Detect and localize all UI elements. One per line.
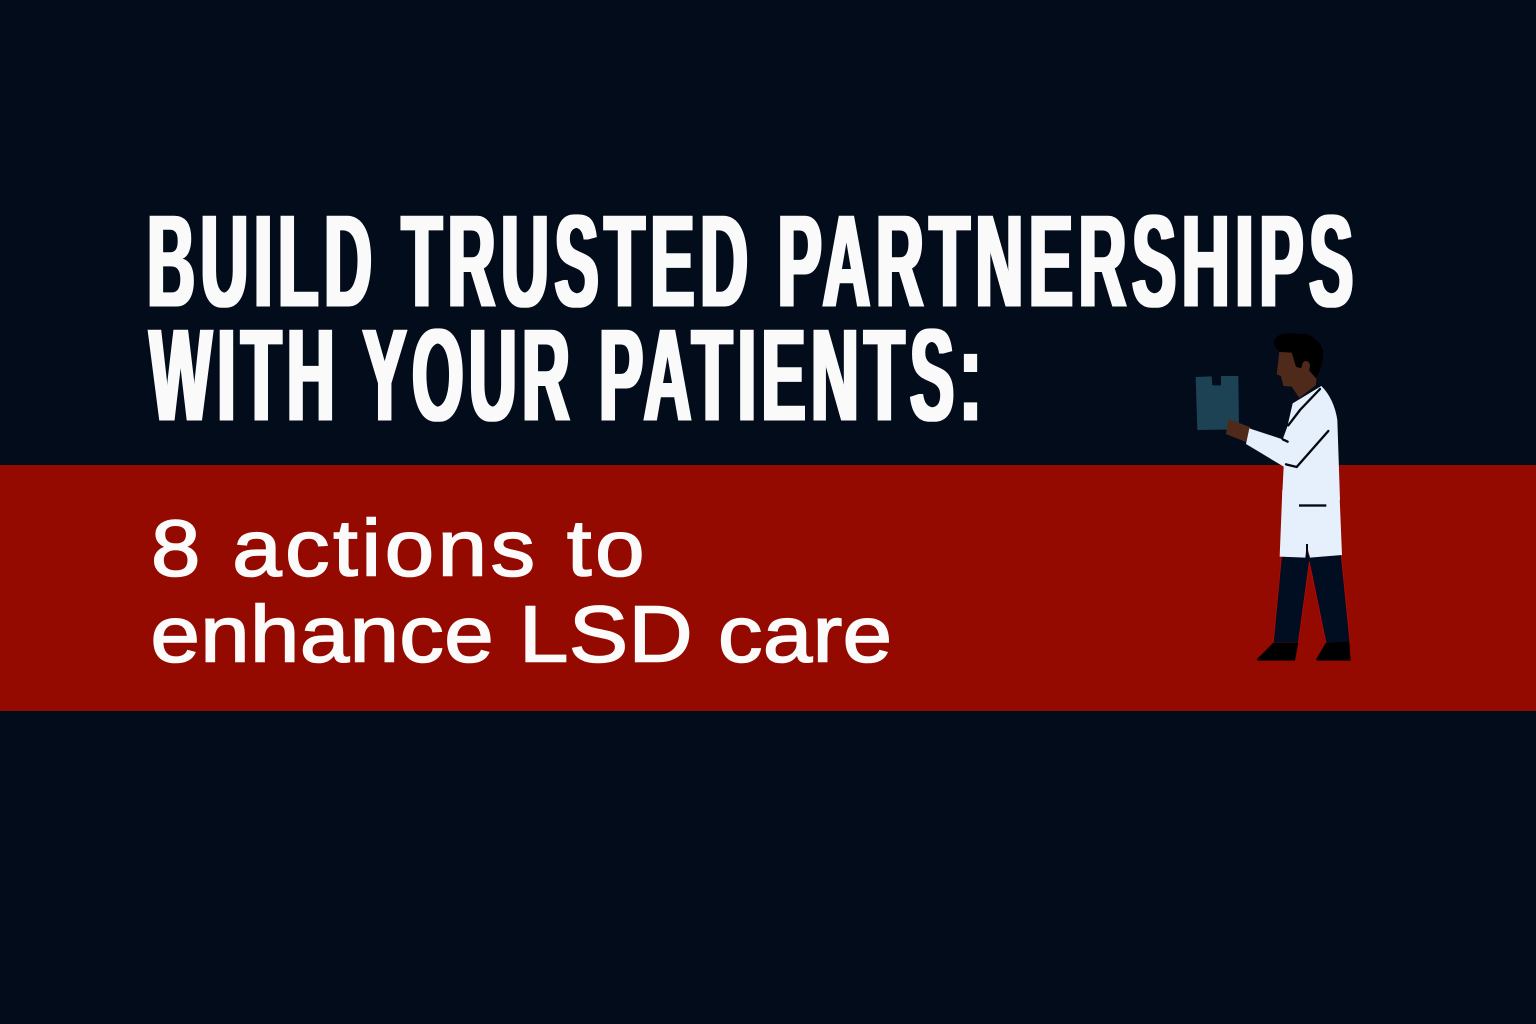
- ear: [1302, 361, 1310, 370]
- doctor lower body: [1257, 490, 1351, 661]
- coat vent: [1306, 544, 1308, 558]
- title: BUILD TRUSTED PARTNERSHIPS: [147, 189, 1353, 336]
- lab coat lower: [1280, 490, 1342, 558]
- subtitle: enhance LSD care: [150, 589, 892, 679]
- trousers: [1273, 553, 1350, 643]
- hair: [1274, 333, 1323, 378]
- title: [147, 189, 1353, 450]
- title: WITH YOUR PATIENTS:: [150, 303, 982, 450]
- subtitle: 8 actions to: [151, 503, 645, 593]
- doctor upper body: [1196, 333, 1340, 500]
- lab coat upper: [1246, 386, 1340, 500]
- hand: [1226, 419, 1251, 442]
- illustration: doctor holding a chart: [1196, 333, 1351, 661]
- subtitle: [150, 503, 892, 679]
- red banner: [0, 465, 1536, 711]
- icon: tablet: [1196, 376, 1239, 430]
- coat folds: [1283, 389, 1328, 467]
- shoes: [1257, 643, 1298, 661]
- face and neck: [1277, 352, 1317, 398]
- coat pocket: [1299, 504, 1326, 507]
